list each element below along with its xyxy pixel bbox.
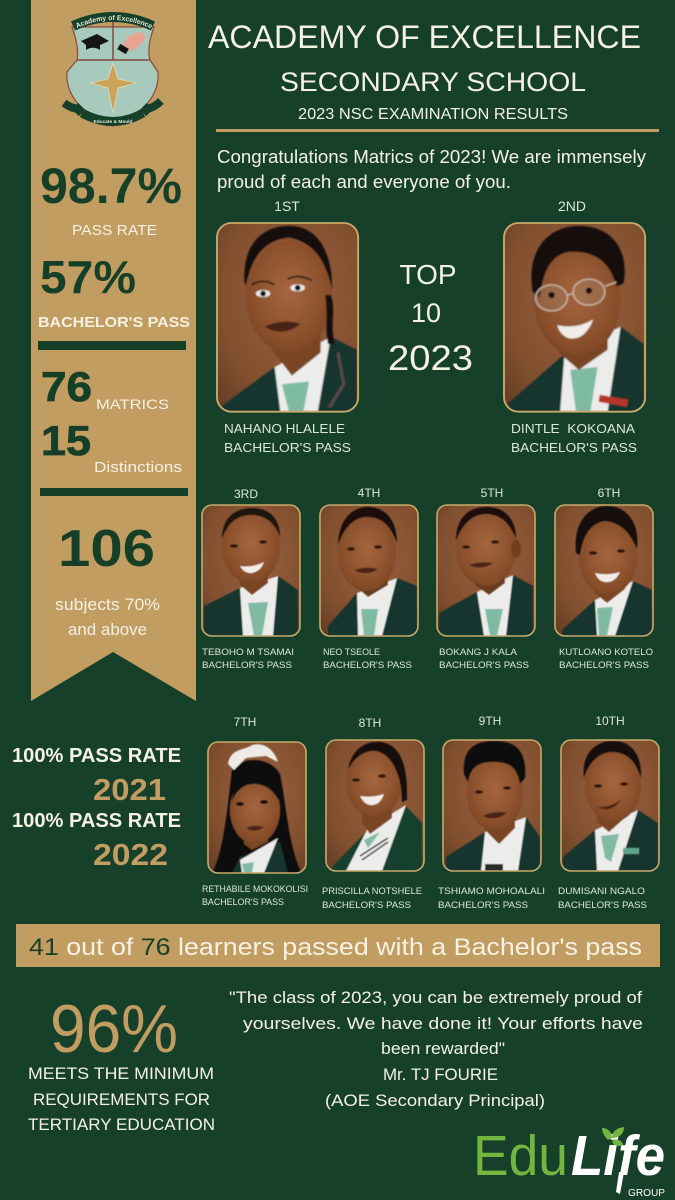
student 6th: Kutloano Kotelo: 6TH — [598, 486, 620, 500]
student 4th: Neo Tseole — [320, 486, 418, 671]
banner: bachelor's pass count: 41 out of 76 learners passed with a Bachelor's pass — [29, 934, 642, 961]
student 8th: Priscilla Notshele: PRISCILLA NOTSHELE — [322, 886, 422, 897]
student 5th: Bokang J Kala — [437, 486, 535, 671]
student 5th: Bokang J Kala: BOKANG J KALA — [439, 647, 518, 658]
principal quote: Mr. TJ FOURIE — [383, 1065, 498, 1084]
student 3rd: Teboho M Tsamai — [202, 487, 300, 671]
callout: 100% pass rate history: 100% PASS RATE — [12, 810, 181, 832]
student 7th: Rethabile Mokokolisi: 7TH — [234, 715, 256, 729]
student 5th: Bokang J Kala: 5TH — [481, 486, 503, 500]
student 2nd: Dintle Kokoana — [504, 198, 645, 455]
logo: EduLife Group: Life — [571, 1124, 665, 1188]
student 7th: Rethabile Mokokolisi — [202, 715, 308, 907]
student 10th: Dumisani Ngalo: DUMISANI NGALO — [558, 886, 645, 897]
congratulations message: Congratulations Matrics of 2023! We are immensely — [217, 147, 646, 167]
stat: pass rate — [40, 158, 182, 239]
student 2nd: Dintle Kokoana: DINTLE KOKOANA — [511, 421, 635, 436]
callout: 100% pass rate history — [12, 745, 181, 872]
icon: school crest: Academy of Excellence — [76, 15, 152, 28]
principal quote: (AOE Secondary Principal) — [325, 1091, 545, 1110]
student 7th: Rethabile Mokokolisi: BACHELOR'S PASS — [202, 897, 284, 907]
student 2nd: Dintle Kokoana: 2ND — [558, 198, 586, 214]
principal quote: yourselves. We have done it! Your efforts have — [243, 1014, 643, 1033]
callout: 100% pass rate history: 2022 — [93, 837, 168, 872]
student 3rd: Teboho M Tsamai: TEBOHO M TSAMAI — [202, 647, 294, 658]
student 9th: Tshiamo Mohoalali — [438, 714, 545, 911]
top 10 heading — [388, 259, 473, 378]
student 4th: Neo Tseole: 4TH — [358, 486, 380, 500]
stat: subjects 70% and above: and above — [68, 620, 147, 639]
stat: matrics — [41, 363, 169, 412]
student 5th: Bokang J Kala: BACHELOR'S PASS — [439, 660, 529, 671]
top 10 heading: TOP — [399, 259, 457, 290]
student 10th: Dumisani Ngalo: BACHELOR'S PASS — [558, 900, 647, 911]
student 6th: Kutloano Kotelo — [555, 486, 653, 671]
stat: subjects 70% and above: subjects 70% — [55, 595, 160, 614]
icon: school crest: Educate & Mould — [94, 119, 133, 125]
stat: bachelor's pass — [38, 251, 190, 331]
student 1st: Nahano Hlalele: NAHANO HLALELE — [224, 421, 345, 436]
stat: subjects 70% and above — [55, 520, 160, 639]
panel: gold stats ribbon — [31, 0, 196, 701]
stat: 96% tertiary requirements — [28, 991, 215, 1134]
student 1st: Nahano Hlalele: 1ST — [274, 198, 300, 214]
stat: distinctions: 15 — [41, 417, 91, 464]
student 7th: Rethabile Mokokolisi: RETHABILE MOKOKOLISI — [202, 884, 308, 894]
stat: distinctions — [41, 417, 182, 476]
principal quote — [229, 988, 643, 1110]
stat: 96% tertiary requirements: REQUIREMENTS FOR — [33, 1090, 210, 1109]
student 3rd: Teboho M Tsamai: BACHELOR'S PASS — [202, 660, 292, 671]
logo: EduLife Group: GROUP — [628, 1188, 665, 1199]
student 9th: Tshiamo Mohoalali: 9TH — [479, 714, 501, 728]
congratulations message — [217, 147, 646, 192]
title — [208, 19, 641, 123]
student 4th: Neo Tseole: BACHELOR'S PASS — [323, 660, 412, 671]
title: ACADEMY OF EXCELLENCE — [208, 19, 641, 55]
stat: 96% tertiary requirements: MEETS THE MINIMUM — [28, 1064, 214, 1083]
student 9th: Tshiamo Mohoalali: BACHELOR'S PASS — [438, 900, 528, 911]
stat: matrics: 76 — [41, 363, 92, 410]
student 1st: Nahano Hlalele: BACHELOR'S PASS — [224, 440, 351, 455]
banner: bachelor's pass count — [16, 924, 660, 967]
stat: pass rate: PASS RATE — [72, 222, 157, 239]
stat: subjects 70% and above: 106 — [58, 520, 155, 578]
student 10th: Dumisani Ngalo — [558, 714, 659, 911]
student 8th: Priscilla Notshele: 8TH — [359, 716, 381, 730]
student 6th: Kutloano Kotelo: BACHELOR'S PASS — [559, 660, 649, 671]
stat: 96% tertiary requirements: 96% — [50, 991, 178, 1067]
student 8th: Priscilla Notshele — [322, 716, 424, 911]
student 8th: Priscilla Notshele: BACHELOR'S PASS — [322, 900, 411, 911]
student 2nd: Dintle Kokoana: BACHELOR'S PASS — [511, 440, 637, 455]
stat: distinctions: Distinctions — [94, 459, 182, 476]
callout: 100% pass rate history: 2021 — [93, 772, 166, 807]
logo: EduLife Group: Edu — [473, 1124, 568, 1188]
stat: pass rate: 98.7% — [40, 158, 182, 214]
top 10 heading: 10 — [411, 298, 441, 328]
student 10th: Dumisani Ngalo: 10TH — [595, 714, 625, 728]
student 1st: Nahano Hlalele — [217, 198, 358, 455]
student 4th: Neo Tseole: NEO TSEOLE — [323, 647, 380, 658]
stat: bachelor's pass: 57% — [40, 251, 136, 303]
title: 2023 NSC EXAMINATION RESULTS — [298, 106, 568, 123]
principal quote: been rewarded" — [381, 1039, 505, 1058]
principal quote: "The class of 2023, you can be extremely proud of — [229, 988, 642, 1007]
icon: leaves — [602, 1127, 624, 1146]
top 10 heading: 2023 — [388, 339, 473, 378]
logo: EduLife Group — [473, 1124, 665, 1199]
stat: matrics: MATRICS — [96, 396, 169, 412]
student 6th: Kutloano Kotelo: KUTLOANO KOTELO — [559, 647, 653, 658]
student 9th: Tshiamo Mohoalali: TSHIAMO MOHOALALI — [438, 886, 545, 897]
title: SECONDARY SCHOOL — [280, 67, 586, 97]
congratulations message: proud of each and everyone of you. — [217, 172, 511, 192]
student 3rd: Teboho M Tsamai: 3RD — [234, 487, 258, 501]
callout: 100% pass rate history: 100% PASS RATE — [12, 745, 181, 767]
stat: 96% tertiary requirements: TERTIARY EDUCATION — [28, 1115, 215, 1134]
stat: bachelor's pass: BACHELOR'S PASS — [38, 314, 190, 331]
icon: school crest — [62, 12, 164, 127]
